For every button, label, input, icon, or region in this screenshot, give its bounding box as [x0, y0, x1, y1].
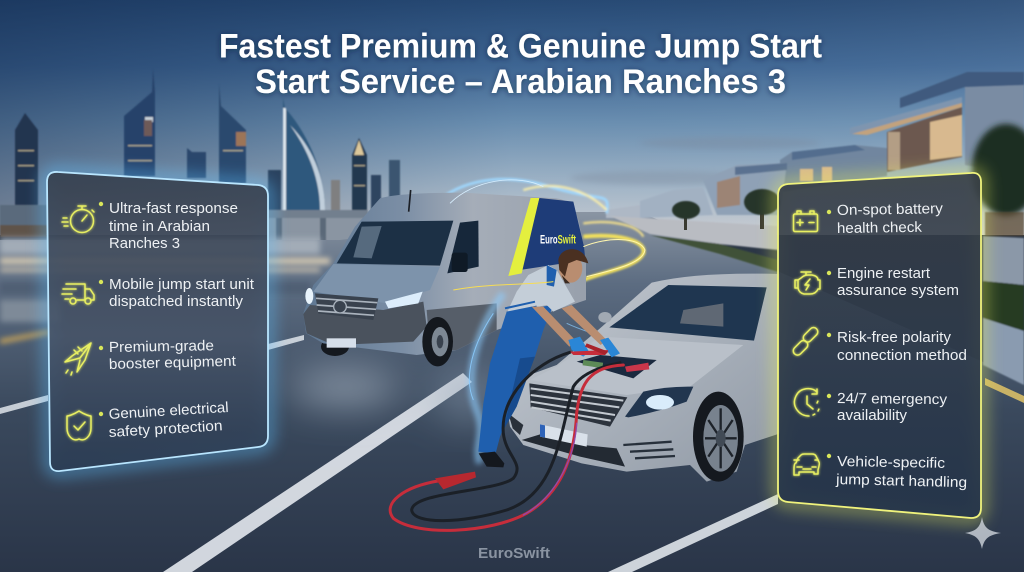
item: battery check [794, 201, 944, 237]
car number plate [540, 424, 588, 447]
item: ultra-fast response: Ultra-fast response [109, 201, 238, 217]
icon: sparkle [965, 517, 1001, 549]
panel: right services [778, 173, 981, 518]
footer brand: EuroSwift [478, 545, 550, 562]
item: vehicle-specific: jump start handling [835, 472, 967, 491]
car windshield [609, 285, 767, 341]
item: emergency availability [794, 389, 948, 424]
technician shirt [507, 265, 575, 313]
background: left highway light streaks [0, 238, 330, 344]
background: headlight pools on road [290, 369, 510, 421]
panel glow [778, 173, 981, 518]
car wheel [693, 392, 744, 482]
technician legs and overalls [478, 305, 553, 453]
background: road markings [0, 335, 1024, 572]
icon: delivery truck [62, 284, 94, 304]
item: genuine electrical safety [67, 400, 229, 441]
technician boot [479, 452, 504, 467]
item: vehicle-specific: Vehicle-specific [837, 454, 945, 472]
item: genuine electrical safety: Genuine electrical [108, 400, 229, 423]
technician arms [532, 307, 577, 347]
van [303, 190, 586, 366]
van antenna [409, 190, 411, 212]
icon: clock [794, 389, 819, 416]
technician [478, 249, 620, 467]
van lower bumper [303, 302, 427, 345]
car [507, 274, 780, 482]
item: emergency availability: availability [837, 408, 908, 424]
item: premium-grade equipment [65, 338, 236, 375]
item: polarity connection [792, 326, 967, 364]
item: polarity connection: connection method [837, 348, 967, 364]
central scene: van, technician, car and cables [303, 179, 780, 530]
background: dusk sky [0, 0, 1024, 235]
van rear wheel [321, 337, 349, 356]
item: ultra-fast response: time in Arabian [109, 219, 210, 235]
van cargo panel and stripe [520, 198, 585, 270]
item: battery check: health check [837, 220, 923, 237]
energy wisps front [450, 180, 645, 290]
item: ultra-fast response: Ranches 3 [109, 236, 180, 252]
van lower side skirt [427, 303, 497, 352]
item: genuine electrical safety: safety protection [108, 418, 223, 441]
panel glow [47, 172, 268, 471]
icon: battery [794, 211, 818, 232]
title: Fastest Premium & Genuine Jump Start [219, 28, 822, 66]
technician gloves [568, 337, 589, 357]
item: mobile jump start unit: Mobile jump start unit [109, 277, 254, 293]
item: engine restart [795, 266, 959, 299]
black cable [412, 352, 620, 521]
jumper cables [390, 343, 623, 530]
engine bay and battery [577, 355, 657, 378]
car lower intake [522, 433, 625, 467]
van hood [313, 264, 440, 303]
red clamp in hand [570, 350, 608, 355]
icon: check shield [67, 411, 91, 440]
palms [672, 124, 1024, 236]
van windshield [337, 221, 453, 266]
icon: car front [794, 454, 819, 475]
car headlight [625, 387, 693, 417]
technician head [559, 254, 582, 283]
van headlight [385, 292, 423, 308]
icon: engine with bolt [795, 272, 820, 294]
technician shirt stripes [505, 302, 537, 313]
red cable [390, 365, 623, 530]
background: city skyline [0, 68, 400, 244]
panel: left services [47, 172, 268, 471]
item: engine restart: Engine restart [837, 266, 930, 282]
energy aura [430, 179, 644, 290]
background: road surface [0, 212, 1024, 572]
van front wheel [422, 317, 453, 366]
icon: stopwatch [62, 206, 94, 232]
title: Start Service – Arabian Ranches 3 [255, 63, 786, 101]
car grille [529, 383, 627, 427]
item: vehicle-specific [794, 454, 967, 491]
item: emergency availability: 24/7 emergency [837, 391, 948, 408]
item: ultra-fast response [62, 201, 238, 252]
red clamp on ground [435, 472, 476, 489]
item: mobile jump start unit [62, 277, 254, 310]
item: mobile jump start unit: dispatched instantly [109, 294, 244, 310]
item: engine restart: assurance system [837, 283, 959, 299]
car mirror [598, 312, 612, 323]
item: premium-grade equipment: Premium-grade [109, 338, 214, 356]
title [219, 28, 822, 101]
item: premium-grade equipment: booster equipment [109, 354, 236, 373]
icon: chain link [792, 326, 820, 357]
item: battery check: On-spot battery [837, 201, 944, 219]
item: polarity connection: Risk-free polarity [837, 330, 952, 346]
van grille and badge [315, 293, 378, 320]
car hood highlight [530, 337, 743, 395]
van logo: EuroSwift [540, 232, 576, 246]
panel card [778, 173, 981, 518]
car body [507, 274, 780, 482]
van body [303, 193, 586, 355]
background: villas and palms [606, 72, 1024, 385]
icon: booster clamp [65, 343, 91, 375]
technician glow [469, 293, 660, 463]
van side window [447, 221, 479, 273]
van number plate [327, 338, 356, 348]
panel card [47, 172, 268, 471]
